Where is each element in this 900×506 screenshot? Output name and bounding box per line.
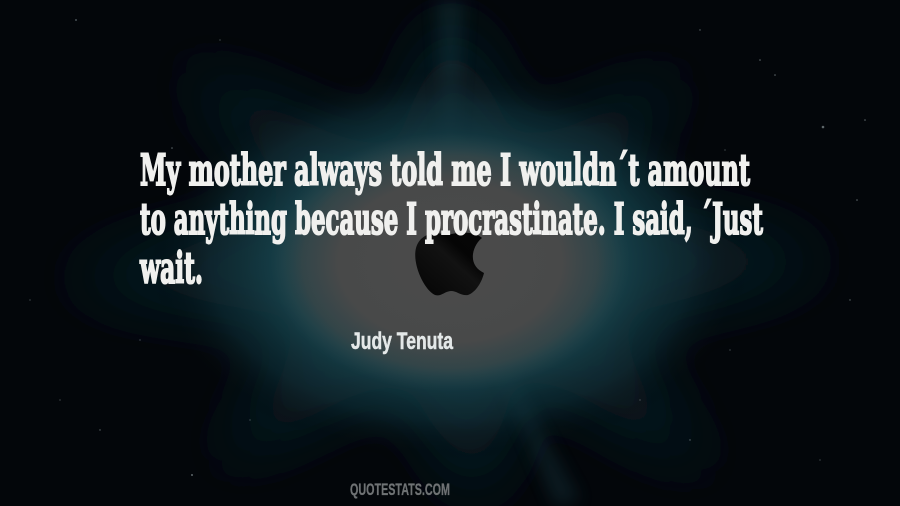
watermark: QUOTESTATS.COM: [350, 480, 450, 499]
icon: apple logo: [415, 233, 484, 295]
quote line 3: wait.: [139, 244, 203, 294]
quote text: [139, 146, 763, 294]
author name: Judy Tenuta: [351, 328, 453, 355]
